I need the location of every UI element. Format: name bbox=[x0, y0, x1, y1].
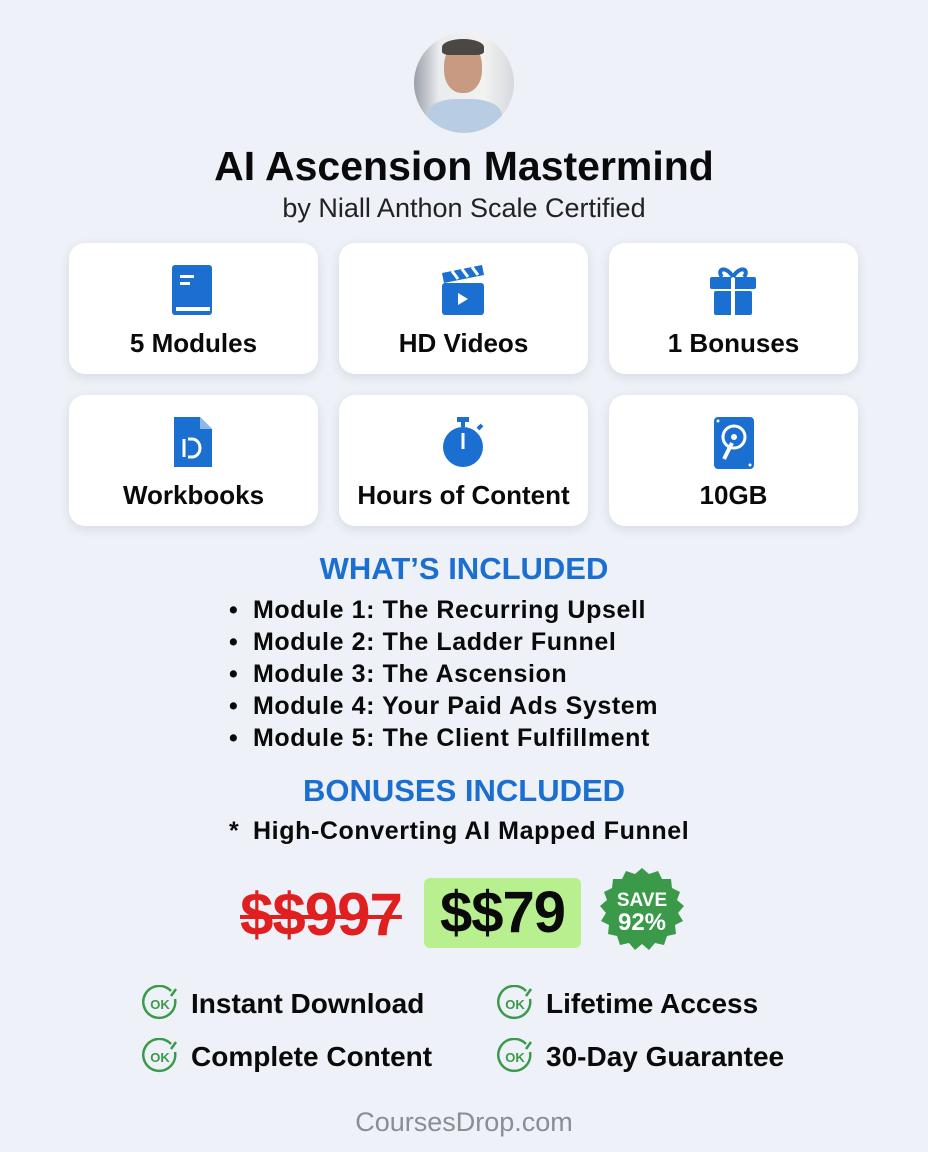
badge: save: 92% bbox=[618, 909, 666, 936]
heading: what's included: WHAT’S INCLUDED bbox=[320, 551, 608, 586]
card: videos: HD Videos bbox=[399, 328, 528, 358]
features: OK bbox=[150, 997, 170, 1012]
features: OK bbox=[505, 997, 525, 1012]
module list: Module 4: Your Paid Ads System bbox=[253, 692, 658, 720]
module list: Module 5: The Client Fulfillment bbox=[253, 724, 650, 752]
card: videos bbox=[339, 243, 588, 374]
badge: save: SAVE bbox=[617, 890, 667, 911]
module list: • bbox=[229, 724, 238, 752]
bonus item: * bbox=[229, 817, 239, 845]
features: OK bbox=[150, 1050, 170, 1065]
card: size: 10GB bbox=[700, 480, 767, 510]
card: bonuses: 1 Bonuses bbox=[668, 328, 799, 358]
card: modules bbox=[69, 243, 318, 374]
badge: save bbox=[600, 868, 684, 950]
icon: gift bbox=[710, 267, 756, 315]
card: hours bbox=[339, 395, 588, 526]
features: OK bbox=[505, 1050, 525, 1065]
module list: • bbox=[229, 628, 238, 656]
module list: • bbox=[229, 692, 238, 720]
features: Instant Download bbox=[191, 988, 424, 1019]
features: Complete Content bbox=[191, 1041, 432, 1072]
icon: book bbox=[172, 265, 212, 315]
old price: $$997 bbox=[240, 881, 402, 948]
module list: Module 1: The Recurring Upsell bbox=[253, 596, 646, 624]
card: workbooks: Workbooks bbox=[123, 480, 264, 510]
features: Lifetime Access bbox=[546, 988, 758, 1019]
features bbox=[142, 985, 784, 1072]
card: size bbox=[609, 395, 858, 526]
card: bonuses bbox=[609, 243, 858, 374]
module list: • bbox=[229, 660, 238, 688]
card: workbooks bbox=[69, 395, 318, 526]
avatar bbox=[414, 33, 514, 133]
card: hours: Hours of Content bbox=[357, 480, 570, 510]
subtitle: by Niall Anthon Scale Certified bbox=[282, 193, 646, 223]
card: modules: 5 Modules bbox=[130, 328, 257, 358]
features: 30-Day Guarantee bbox=[546, 1041, 784, 1072]
new price: $$79 bbox=[440, 880, 565, 945]
icon: clapper bbox=[442, 265, 484, 315]
icon: stopwatch bbox=[443, 417, 484, 467]
module list: Module 2: The Ladder Funnel bbox=[253, 628, 616, 656]
module list: • bbox=[229, 596, 238, 624]
module list: Module 3: The Ascension bbox=[253, 660, 567, 688]
icon: hard drive bbox=[714, 417, 754, 469]
title: AI Ascension Mastermind bbox=[214, 143, 714, 189]
footer: CoursesDrop.com bbox=[355, 1107, 573, 1137]
module list bbox=[229, 596, 658, 752]
heading: bonuses: BONUSES INCLUDED bbox=[303, 773, 625, 808]
icon: document bbox=[174, 417, 212, 467]
bonus item: High-Converting AI Mapped Funnel bbox=[253, 817, 689, 845]
